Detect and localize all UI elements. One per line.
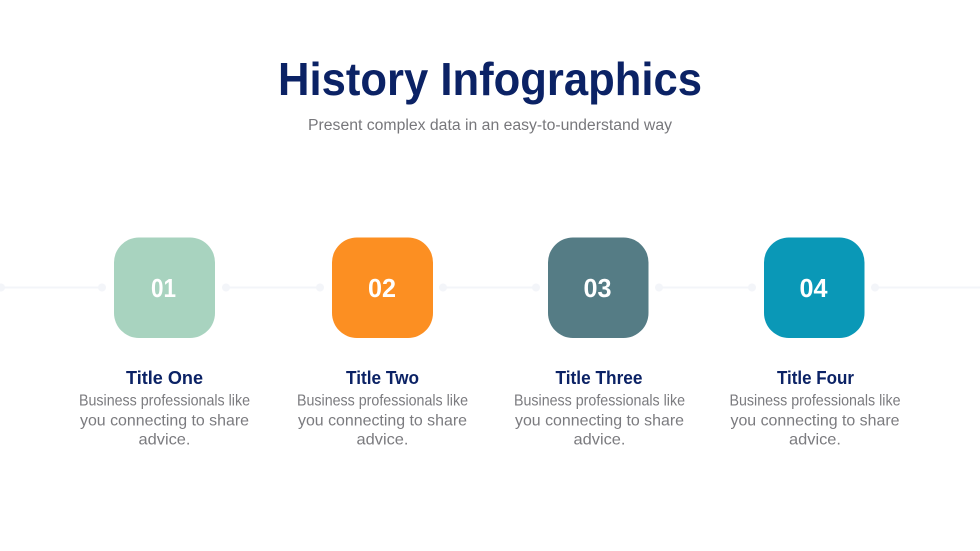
description 04: advice.	[789, 432, 841, 448]
timeline connector: left edge to step 1	[0, 284, 106, 292]
badge 02: 02	[368, 273, 396, 303]
step 02	[297, 238, 468, 448]
description 04	[730, 392, 901, 448]
description 03: Business professionals like	[514, 392, 685, 410]
description 02: advice.	[356, 432, 408, 448]
description 01: you connecting to share	[80, 412, 249, 430]
heading: Title One: Title One	[126, 368, 203, 388]
description 03: you connecting to share	[515, 412, 684, 430]
description 03: advice.	[574, 432, 626, 448]
badge 03	[548, 238, 648, 338]
step 03	[514, 238, 685, 448]
timeline connector: step 2 to step 3	[439, 284, 540, 292]
step 04	[730, 238, 901, 448]
description 04: Business professionals like	[730, 392, 901, 410]
timeline connector: step 1 to step 2	[222, 284, 324, 292]
description 02: you connecting to share	[298, 412, 467, 430]
badge 04: 04	[800, 273, 828, 303]
step 01	[79, 238, 250, 448]
description 02: Business professionals like	[297, 392, 468, 410]
timeline connector: step 4 to right edge	[871, 284, 980, 292]
badge 01: 01	[151, 273, 176, 303]
description 01: Business professionals like	[79, 392, 250, 410]
description 02	[297, 392, 468, 448]
badge 02	[332, 238, 433, 338]
heading: Title Two: Title Two	[346, 368, 419, 388]
badge 04	[764, 238, 864, 338]
title: History Infographics	[278, 53, 702, 105]
description 03	[514, 392, 685, 448]
subtitle: Present complex data in an easy-to-understand way	[308, 117, 672, 134]
description 01	[79, 392, 250, 448]
badge 03: 03	[584, 273, 612, 303]
badge 01	[114, 238, 215, 338]
heading: Title Four: Title Four	[777, 368, 854, 388]
description 01: advice.	[138, 432, 190, 448]
description 04: you connecting to share	[730, 412, 900, 430]
heading: Title Three: Title Three	[556, 368, 642, 388]
timeline connector: step 3 to step 4	[655, 284, 756, 292]
